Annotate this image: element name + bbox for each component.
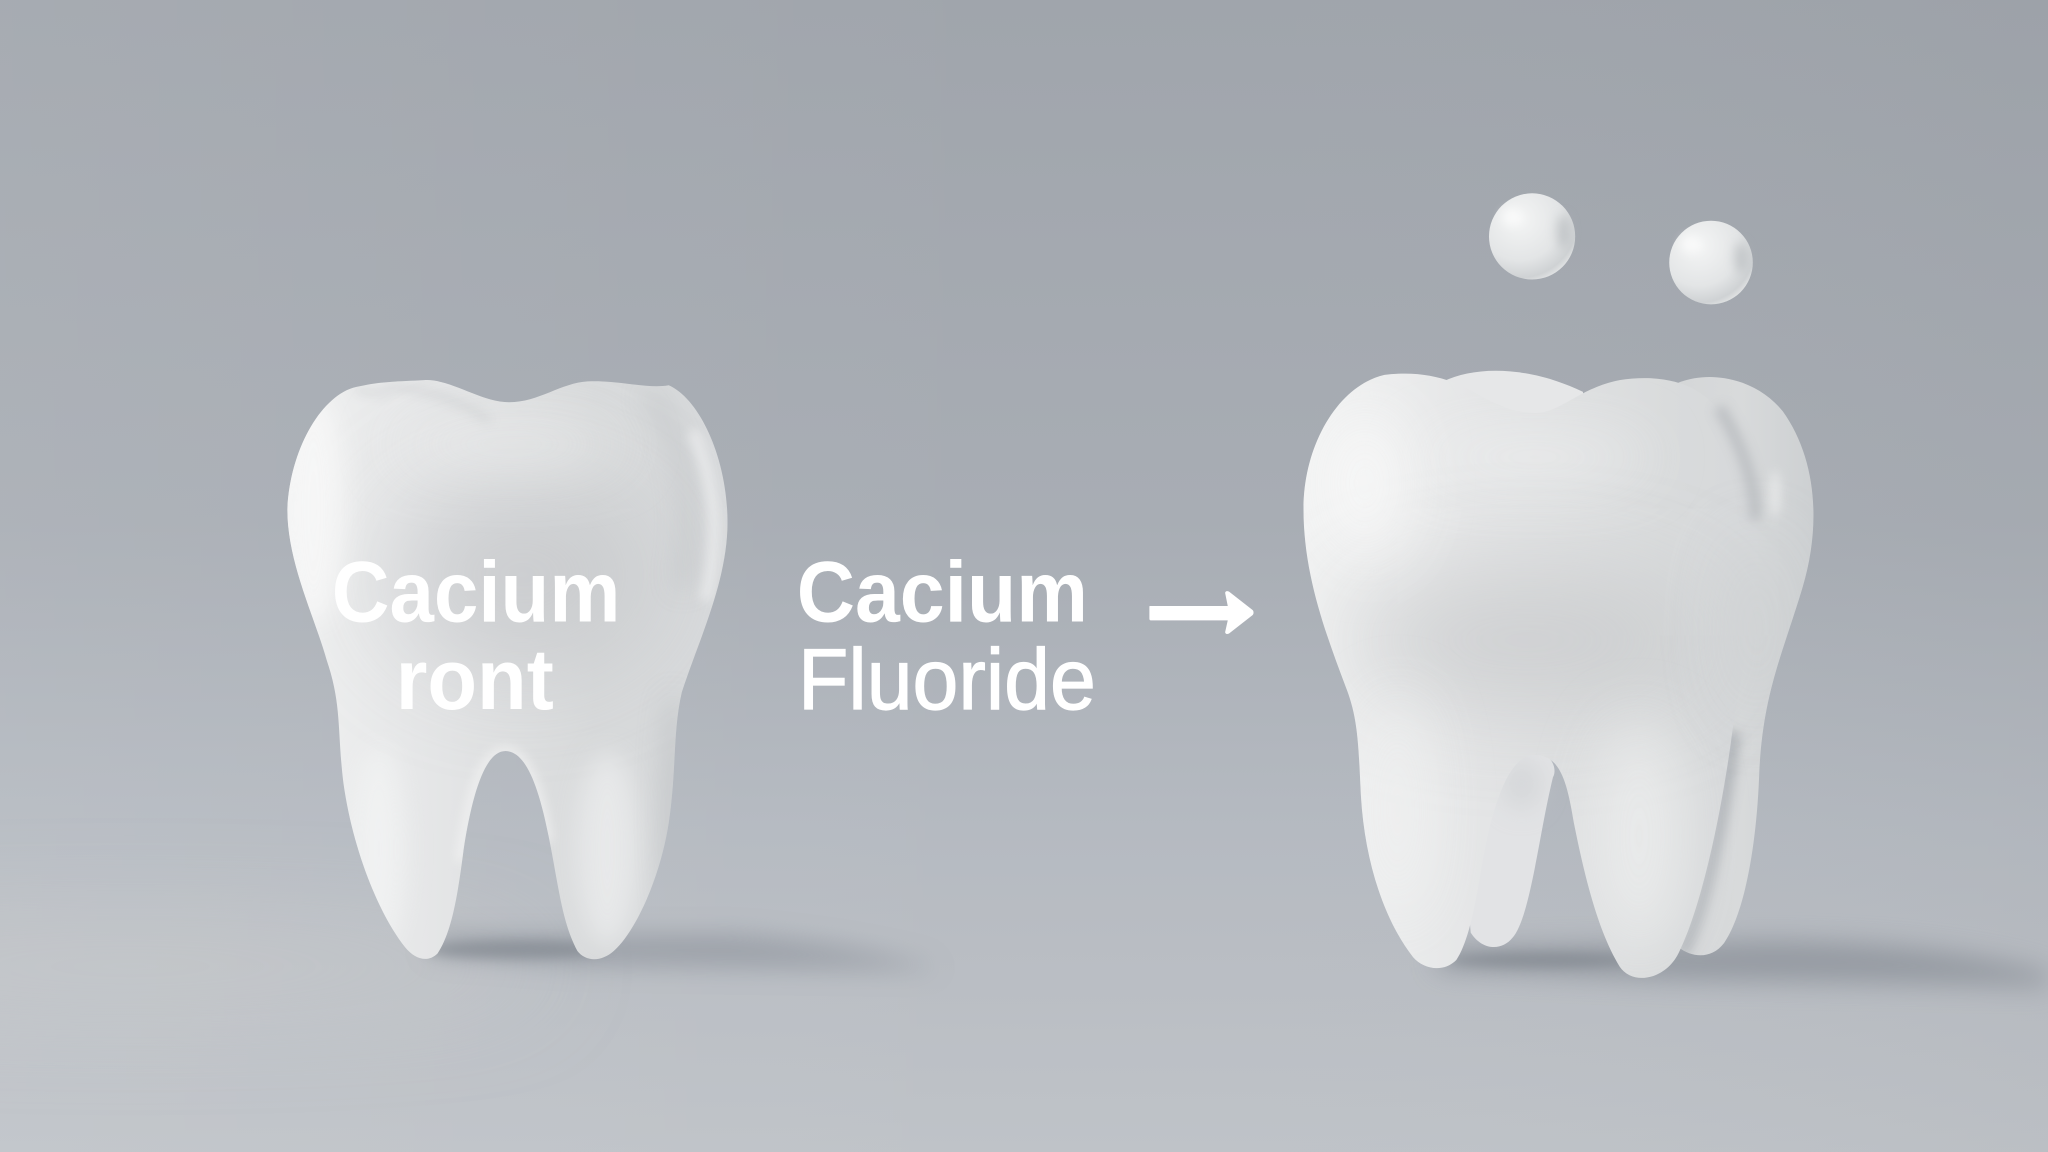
right tooth <box>1304 371 1813 978</box>
back roots and lobes <box>1443 371 1813 955</box>
label: Cacium ront: ront <box>396 632 554 728</box>
floor shadow: left tooth <box>424 935 940 969</box>
label: Cacium Fluoride: Cacium <box>797 545 1088 641</box>
floor shadow: right tooth <box>1437 940 2048 986</box>
label: Cacium ront <box>332 545 620 728</box>
label: Cacium Fluoride: Fluoride <box>798 632 1096 728</box>
label: Cacium ront: Cacium <box>332 545 620 641</box>
left tooth <box>282 380 728 959</box>
label: Cacium Fluoride <box>797 545 1096 728</box>
droplet 2 <box>1669 221 1753 304</box>
arrow <box>1149 591 1254 634</box>
droplet 1 <box>1489 193 1575 280</box>
front body <box>1304 374 1758 978</box>
